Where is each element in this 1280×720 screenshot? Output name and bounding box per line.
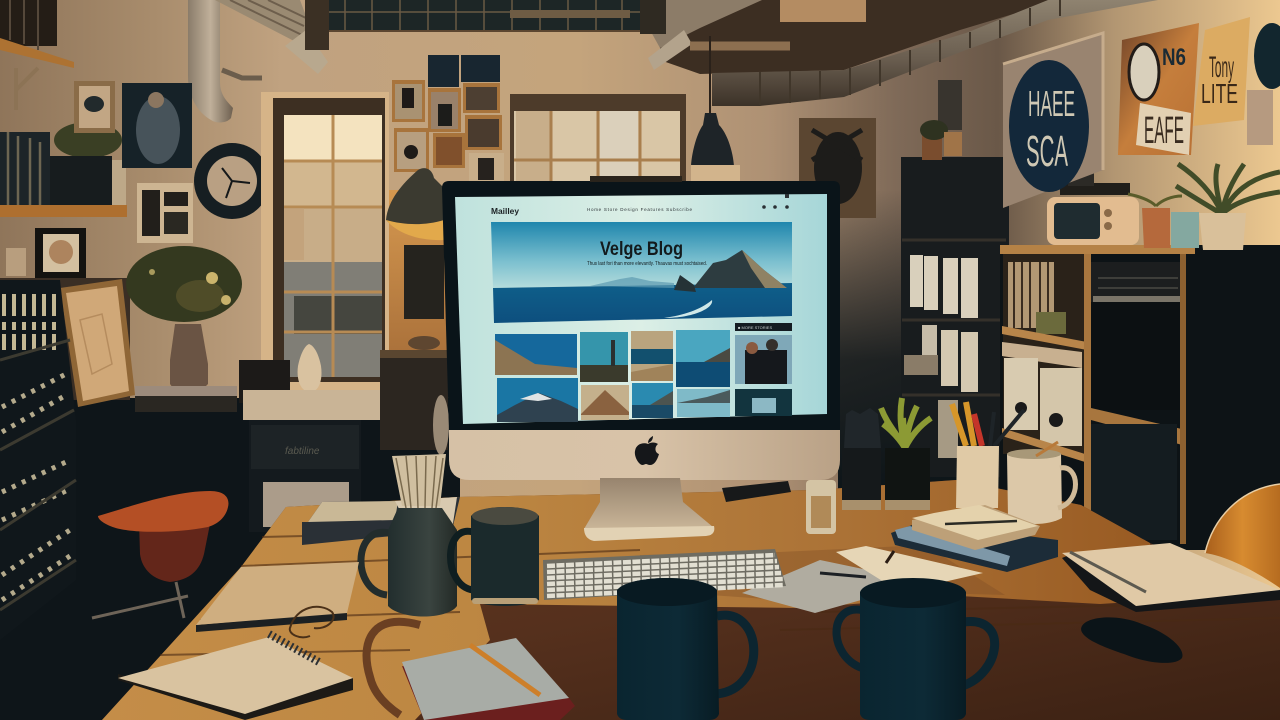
right nozzle duct [640,0,866,70]
bundle of pencils [392,454,446,506]
remote control [722,481,791,502]
shelf plants in pots [1128,164,1280,250]
ledge with book and box [135,344,322,412]
wall clock [194,143,270,219]
hanging pendant lamp [691,36,740,182]
window left [261,92,389,390]
loose papers [742,546,983,613]
thumbnail grid [495,323,792,422]
black cabinet under window [380,336,449,455]
grey mug with pencils [361,454,457,616]
open notebook right [1062,543,1280,612]
warm glow on wall beside lamp [388,190,448,360]
desk lamp behind monitor [386,168,444,240]
keyboard [543,549,786,600]
nav icons [762,194,789,209]
top shelf with books [0,0,74,110]
long ribbed duct right [712,0,1158,106]
monitor stand and foot [584,478,714,541]
large dark mug center [617,578,754,720]
round sign HAZE SCA: HAEE [1028,83,1075,124]
small glass jar [806,480,836,534]
stacked books right [891,505,1058,572]
sunlit desk area [102,480,1160,720]
tall dark filing rack [0,280,76,640]
orange wall poster with clock: EAFE [1144,110,1184,152]
wall framed art [799,80,962,218]
left vertical duct [188,0,262,122]
desk surface [102,480,1280,720]
framed pictures left wall [6,81,193,278]
right wooden cabinet [1000,245,1280,550]
notebook stack left-top [302,497,460,545]
yellow wall note: LITE [1201,78,1238,109]
dark mug second [450,507,539,606]
side table with drawer: fabtiline [285,446,320,457]
dark ceiling right [660,0,1060,74]
apple-style logo [635,436,659,465]
monitor chin [449,430,840,480]
clipboard with glasses [196,562,359,637]
colored pencils in cup [952,402,1024,508]
dark lower left room [0,398,460,720]
round disc and pinned paper [1247,23,1280,145]
webcam [590,176,682,182]
monitor [442,176,840,480]
photo collage between windows [392,55,504,181]
side table with drawer [243,390,386,532]
orange stool [92,491,228,618]
spiral notebook bottom-left [118,634,353,720]
pen holder glass [842,408,881,510]
large easel board [60,279,135,407]
ceiling grate [325,0,645,30]
diagonal duct with nozzle [215,0,329,74]
monitor bezel [442,181,840,431]
white mug on desk [1007,442,1076,524]
upper wall left of window shading [0,278,130,400]
site logo: Mailley [491,207,520,216]
retro microwave [1047,162,1139,245]
hero subtitle: Thus last fori than more elevantly. Thauvas must sochtaised. [587,261,707,267]
orange wall poster with clock: N6 [1162,44,1186,71]
dark mouse [1081,617,1183,663]
navigation: Home Store Design Features Subscribe [587,207,692,212]
right room shadow [838,190,1008,500]
mug handle shadow [367,622,420,715]
notebook with pencil [402,638,575,720]
round sign HAZE SCA: SCA [1026,127,1068,176]
thumbnail grid: ■ MORE STORIES [738,325,772,330]
yellow wall note [1193,17,1250,126]
plant in glass [881,398,931,510]
hero image [491,222,792,323]
dark shelf with binders [901,157,1009,477]
round sign HAZE SCA [1003,33,1103,208]
web page on screen [455,194,827,424]
window right [510,94,686,184]
large dark mug right [836,578,995,720]
chair right [1205,484,1280,588]
orange wall poster with clock [1118,23,1199,155]
hero title: Velge Blog [600,239,683,260]
dark wall poster [404,245,444,319]
ceiling left band [325,0,645,32]
yellow wall note: Tony [1209,51,1234,84]
flower vase on ledge [126,246,242,392]
lower shelf books and plant [0,122,127,217]
